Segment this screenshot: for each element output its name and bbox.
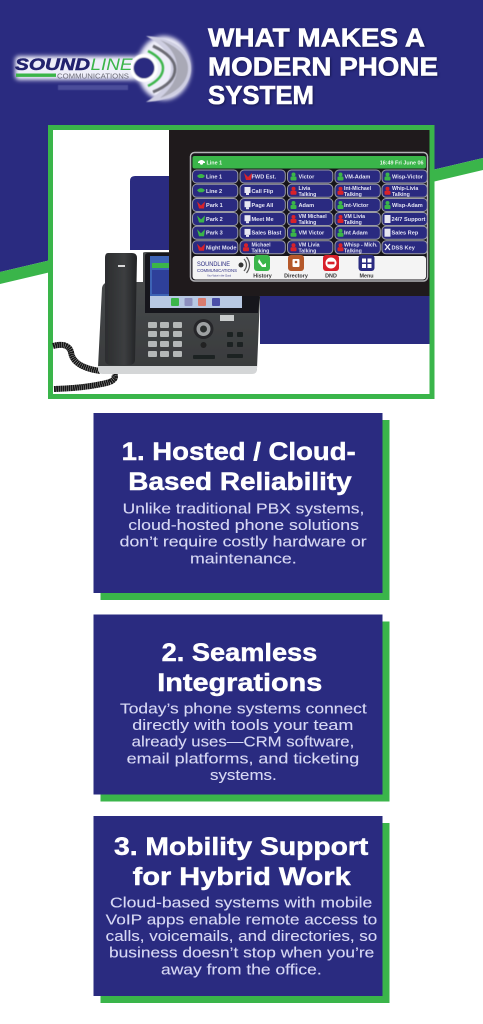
phone label: [220, 315, 234, 321]
softkey: Whisp - Mich. Talking: Talking: [344, 248, 362, 254]
card 1 body text: maintenance.: [190, 550, 297, 567]
softkey: Wisp-Victor: [382, 170, 427, 183]
logo faint phone number: [58, 85, 128, 90]
button: Menu: Menu: [359, 274, 374, 280]
phone silver base strip: [98, 366, 257, 374]
card 2 body text: [120, 700, 368, 784]
panel: product image frame: [50, 128, 432, 396]
panel status bar: [192, 156, 426, 168]
softkey: Meet Me: [240, 212, 285, 226]
card 1 body text: don’t require costly hardware or: [120, 534, 367, 551]
softkey: Page All: [240, 198, 285, 212]
softkey: 24/7 Support: [382, 212, 427, 226]
logo wordmark: [15, 55, 133, 80]
softkey: Int-Michael Talking: Talking: [344, 192, 362, 198]
card 2 heading: 2. Seamless: [162, 639, 317, 667]
softkey: Livia Talking: Talking: [298, 192, 316, 198]
card 3 green shadow: [100, 823, 390, 1003]
panel: card 1 hosted reliability: [94, 413, 390, 600]
panel bottom bar: [192, 255, 426, 280]
title: [208, 22, 438, 110]
card 1 body text: cloud-hosted phone solutions: [128, 517, 359, 534]
softkey: VM Livia Talking: VM Livia: [344, 214, 365, 220]
softkey: Whisp - Mich. Talking: Whisp - Mich.: [344, 242, 378, 248]
card 1 green shadow: [100, 420, 390, 600]
softkey: 24/7 Support: 24/7 Support: [392, 217, 426, 223]
card 2 heading: Integrations: [157, 669, 322, 697]
card 3 body text: away from the office.: [161, 961, 322, 978]
panel backing: [169, 130, 430, 296]
softkey: Park 3: Park 3: [206, 231, 223, 237]
mini logo: COMMUNICATIONS: [197, 268, 237, 273]
softkey: Whisp - Mich. Talking: [335, 241, 380, 254]
softkey: Sales Blast: [240, 226, 285, 239]
softkey: Adam: Adam: [298, 203, 314, 209]
softkey: Wisp-Victor: Wisp-Victor: [392, 174, 424, 180]
phone navigation disc: [194, 319, 214, 348]
panel inner border: [190, 152, 428, 281]
softkey: VM Livia Talking second: [288, 241, 333, 254]
softkey grid: [192, 170, 427, 254]
softkey: VM Michael Talking: Talking: [298, 220, 316, 226]
softkey: Livia Talking: Livia: [298, 186, 310, 192]
logo white glow: [15, 36, 191, 100]
card 2 heading: [157, 639, 322, 697]
title: SYSTEM: [208, 80, 314, 110]
softkey: Michael Talking: Talking: [252, 248, 269, 254]
card 2 body text: directly with tools your team: [132, 717, 353, 734]
softkey: DSS Key: [382, 241, 427, 254]
panel status bar: 16:49 Fri June 06: [380, 160, 424, 166]
softkey: Livia Talking: [288, 184, 333, 198]
card 3 heading: 3. Mobility Support: [114, 833, 369, 861]
button: Menu: [358, 255, 374, 280]
softkey: VM Michael Talking: VM Michael: [298, 214, 327, 220]
softkey: Park 3: [192, 226, 238, 239]
card 1 heading: Based Reliability: [128, 468, 352, 496]
card 1 heading: 1. Hosted / Cloud-: [122, 438, 356, 466]
softkey: Int-Michael Talking: Int-Michael: [344, 186, 372, 192]
logo sound rings: [130, 36, 191, 102]
green diagonal stripe: [0, 158, 483, 284]
button: History: History: [253, 274, 272, 280]
softkey: Victor: [288, 170, 333, 183]
softkey: Line 2: Line 2: [206, 189, 222, 195]
button: DND: DND: [325, 274, 337, 280]
logo wordmark: LINE: [90, 55, 133, 74]
card 1 body text: [120, 500, 367, 567]
softkey: Victor: Victor: [298, 174, 315, 180]
logo wordmark: SOUND: [15, 55, 90, 74]
black touch screen panel: [169, 130, 430, 296]
softkey: Sales Rep: Sales Rep: [392, 231, 419, 237]
card 1 background: [94, 413, 382, 593]
softkey: Michael Talking: [240, 241, 285, 254]
frame border and white fill: [50, 128, 432, 396]
card 3 heading: for Hybrid Work: [133, 863, 351, 891]
phone screen display: [150, 256, 242, 308]
panel: card 3 mobility support: [94, 816, 390, 1003]
softkey: Michael Talking: Michael: [252, 242, 271, 248]
softkey: VM-Adam: VM-Adam: [344, 174, 370, 180]
softkey: FWD Est.: [240, 170, 285, 183]
card 1 heading: [122, 438, 356, 496]
softkey: Sales Blast: Sales Blast: [252, 231, 281, 237]
softkey: Call Flip: [240, 184, 285, 197]
softkey: Whip-Livia Talking: Talking: [392, 192, 410, 198]
card 3 body text: business doesn’t stop when you’re: [109, 945, 374, 962]
card 2 background: [94, 614, 382, 794]
card 3 body text: calls, voicemails, and directories, so: [106, 928, 377, 945]
softkey: VM Victor: [288, 226, 333, 239]
phone handset: [105, 253, 137, 365]
softkey: Line 2: [192, 184, 238, 197]
card 3 body text: Cloud-based systems with mobile: [110, 895, 372, 912]
softkey: Park 2: Park 2: [206, 217, 223, 223]
navy backdrop upper left: [130, 176, 169, 250]
softkey: VM Victor: VM Victor: [298, 231, 325, 237]
desk phone illustration: [53, 252, 260, 389]
softkey: FWD Est.: FWD Est.: [252, 174, 276, 180]
mini logo: [197, 257, 250, 278]
softkey: Whip-Livia Talking: Whip-Livia: [392, 186, 418, 192]
softkey: Line 1: [192, 170, 238, 183]
mini logo: Your Voice in the Cloud: [207, 274, 231, 278]
navy backdrop lower right: [260, 296, 430, 344]
phone keypad: [148, 322, 182, 357]
mini logo: SOUNDLINE: [197, 261, 231, 268]
logo wordmark: COMMUNICATIONS: [57, 74, 129, 80]
softkey: Wisp-Adam: Wisp-Adam: [392, 203, 423, 209]
phone body: [98, 252, 260, 373]
softkey: VM Livia Talking second: Talking: [298, 248, 316, 254]
card 3 body text: VoIP apps enable remote access to: [106, 911, 377, 928]
softkey: Adam: [288, 198, 333, 212]
softkey: Meet Me: Meet Me: [252, 217, 274, 223]
softkey: DSS Key: DSS Key: [392, 245, 416, 251]
softkey: Park 2: [192, 212, 238, 226]
panel: card 2 seamless integrations: [94, 614, 390, 802]
card 2 body text: systems.: [210, 767, 277, 784]
card 3 heading: [114, 833, 369, 891]
softkey: Line 1: Line 1: [206, 174, 222, 180]
button: Directory: Directory: [284, 274, 308, 280]
softkey: Page All: Page All: [252, 203, 274, 209]
softkey: Park 1: [192, 198, 238, 212]
softkey: Night Mode: Night Mode: [206, 245, 236, 251]
header navy band with diagonal edge: [0, 0, 483, 272]
button: DND: [323, 255, 339, 280]
logo: Soundline Communications: [15, 36, 191, 102]
card 1 body text: Unlike traditional PBX systems,: [123, 500, 364, 517]
softkey: VM Livia Talking second: VM Livia: [298, 242, 320, 248]
card 2 body text: email platforms, and ticketing: [127, 750, 359, 767]
softkey: VM-Adam: [335, 170, 380, 183]
phone function buttons: [193, 332, 243, 359]
panel status bar: Line 1: [206, 160, 222, 166]
softkey: Int Adam: [335, 226, 380, 239]
softkey: VM Michael Talking: [288, 212, 333, 226]
title: WHAT MAKES A: [208, 22, 425, 52]
phone coiled cord: [53, 345, 119, 389]
bottom bar background: [192, 256, 426, 280]
softkey: Wisp-Adam: [382, 198, 427, 212]
softkey: Int-Michael Talking: [335, 184, 380, 198]
softkey: Sales Rep: [382, 226, 427, 239]
softkey: Call Flip: Call Flip: [252, 189, 274, 195]
card 2 green shadow: [100, 622, 390, 802]
title: MODERN PHONE: [208, 51, 438, 81]
softkey: VM Livia Talking: [335, 212, 380, 226]
card 3 background: [94, 816, 382, 996]
card 2 body text: already uses—CRM software,: [132, 734, 354, 751]
softkey: Int-Victor: Int-Victor: [344, 203, 369, 209]
softkey: Int Adam: Int Adam: [344, 231, 368, 237]
softkey: VM Livia Talking: Talking: [344, 220, 362, 226]
softkey: Park 1: Park 1: [206, 203, 223, 209]
handset badge: [118, 265, 125, 267]
button: History: [253, 255, 272, 280]
card 2 body text: Today’s phone systems connect: [120, 700, 368, 717]
button: Directory: [284, 255, 308, 280]
softkey: Int-Victor: [335, 198, 380, 212]
softkey: Whip-Livia Talking: [382, 184, 427, 198]
phone screen bezel: [145, 253, 260, 313]
softkey: Night Mode: [192, 241, 238, 254]
card 3 body text: [106, 895, 377, 978]
